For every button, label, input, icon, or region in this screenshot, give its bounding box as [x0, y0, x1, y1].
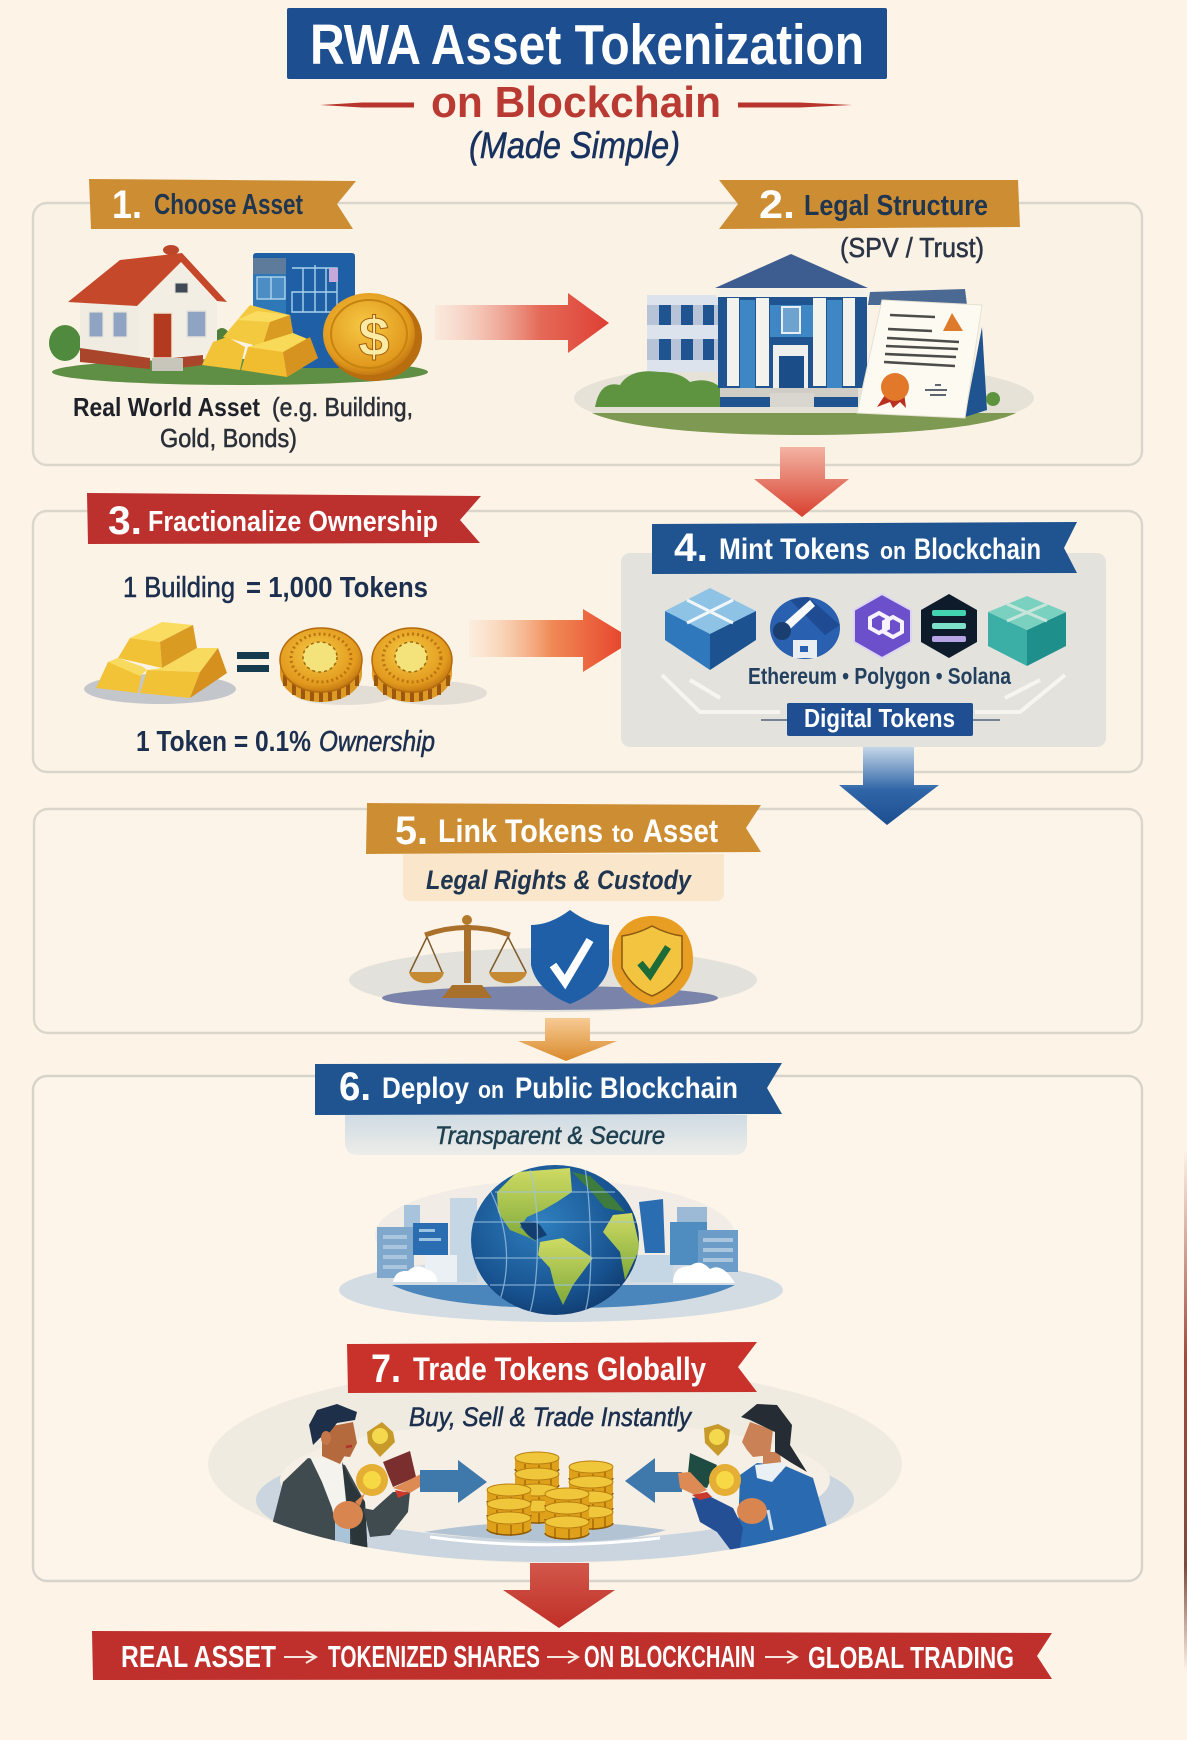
- step 7 ribbon: 7.: [371, 1347, 401, 1391]
- step 2 caption: (SPV / Trust): [840, 232, 984, 263]
- icon: left trader: [272, 1404, 420, 1548]
- arrow: trader to coins: [420, 1460, 487, 1503]
- equation: token ownership: [136, 726, 435, 758]
- step 5 ribbon: 5.: [395, 809, 428, 853]
- summary ribbon: ON BLOCKCHAIN: [584, 1639, 755, 1674]
- icon: teal cube: [988, 596, 1066, 666]
- icon: blue cube: [665, 588, 756, 670]
- subtitle: on Blockchain: [320, 78, 852, 127]
- step 1 ribbon: Choose Asset: [154, 189, 303, 221]
- equation: building to tokens: = 1,000 Tokens: [246, 572, 428, 604]
- icon: blue token: [770, 597, 840, 659]
- step 7 scene backdrop: [208, 1365, 902, 1563]
- arrow: step 4 to 5: [839, 747, 939, 825]
- step 1 ribbon: 1.: [112, 183, 142, 227]
- icon: equals sign: [237, 652, 269, 672]
- arrow: trader to coins right: [625, 1458, 682, 1503]
- caption: real world asset: [73, 392, 413, 453]
- caption: real world asset: (e.g. Building,: [272, 392, 413, 422]
- label: digital tokens: Digital Tokens: [804, 703, 955, 733]
- step 6 ribbon: on: [478, 1077, 504, 1104]
- panel: mint tokens: [621, 522, 1106, 747]
- step 7 ribbon: Trade Tokens Globally: [413, 1351, 706, 1387]
- subheading: legal rights: [403, 854, 724, 901]
- panel: steps 3 and 4: [33, 511, 1142, 772]
- step 2 ribbon: [719, 180, 1020, 229]
- label: networks: Ethereum • Polygon • Solana: [748, 663, 1011, 689]
- step 4 ribbon: Mint Tokens: [719, 533, 870, 566]
- icon: polygon: [854, 594, 911, 658]
- step 5 ribbon: [366, 803, 761, 854]
- step 3 ribbon: [87, 493, 481, 544]
- caption: trade instantly: Buy, Sell & Trade Instantly: [409, 1402, 692, 1432]
- icon: globe and city: [339, 1165, 783, 1322]
- step 7 ribbon: [347, 1342, 757, 1393]
- panel: step 5: [34, 809, 1142, 1033]
- step 6 ribbon: Public Blockchain: [515, 1072, 738, 1105]
- subheading: legal rights: Legal Rights & Custody: [426, 865, 693, 895]
- arrow: step 2 to 4: [754, 447, 849, 517]
- equation: building to tokens: 1 Building: [123, 572, 235, 604]
- arrow: step 7 to summary: [503, 1563, 615, 1628]
- step 4 ribbon: on: [880, 538, 906, 565]
- panel: steps 6 and 7: [33, 1076, 1142, 1581]
- icon: right trader: [678, 1404, 827, 1560]
- step 5 ribbon: Link Tokens: [438, 813, 603, 849]
- step 3 ribbon: Fractionalize Ownership: [148, 506, 438, 538]
- panel: steps 1 and 2: [33, 203, 1142, 465]
- summary ribbon: GLOBAL TRADING: [808, 1640, 1014, 1675]
- summary ribbon: REAL ASSET: [121, 1639, 276, 1674]
- step 1 ribbon: [89, 179, 356, 229]
- caption: real world asset: Gold, Bonds): [160, 423, 297, 453]
- icon: solana: [921, 594, 977, 658]
- step 2 ribbon: 2.: [759, 183, 795, 227]
- label: digital tokens: [761, 703, 1000, 736]
- step 3 ribbon: 3.: [108, 499, 142, 543]
- summary ribbon: [92, 1631, 1052, 1680]
- caption: real world asset: Real World Asset: [73, 392, 260, 422]
- subtitle: made simple: (Made Simple): [469, 125, 680, 166]
- icon: coin stacks: [487, 1452, 613, 1540]
- icon: gold bars: [84, 622, 236, 704]
- subtitle: on Blockchain: on Blockchain: [431, 78, 721, 127]
- step 6 ribbon: [315, 1063, 782, 1115]
- step 6 ribbon: 6.: [339, 1065, 371, 1109]
- arrow: step 5 to 6: [518, 1018, 617, 1061]
- arrow: step 1 to 2: [435, 293, 609, 353]
- equation: token ownership: 1 Token = 0.1%: [136, 726, 311, 758]
- icon: real world assets: [49, 245, 428, 385]
- icon: token coins: [280, 628, 487, 705]
- icon: scales and shields: [349, 910, 757, 1012]
- equation: token ownership: Ownership: [319, 726, 435, 758]
- step 4 ribbon: Blockchain: [914, 533, 1041, 566]
- step 2 ribbon: Legal Structure: [804, 190, 988, 222]
- icon: legal building and certificate: [574, 254, 1034, 435]
- step 4 ribbon: [652, 522, 1077, 574]
- step 5 ribbon: to: [612, 820, 634, 848]
- summary ribbon: TOKENIZED SHARES: [328, 1639, 540, 1674]
- arrow: step 3 to 4: [469, 609, 634, 672]
- step 6 ribbon: Deploy: [382, 1072, 469, 1105]
- equation: building to tokens: [123, 572, 428, 604]
- subheading: transparent and secure: Transparent & Secure: [435, 1122, 665, 1150]
- step 5 ribbon: Asset: [643, 813, 718, 849]
- step 4 ribbon: 4.: [674, 526, 708, 570]
- subheading: transparent and secure: [345, 1115, 747, 1155]
- title: RWA Asset Tokenization: [310, 13, 864, 77]
- icon: real world assets: $: [358, 305, 390, 368]
